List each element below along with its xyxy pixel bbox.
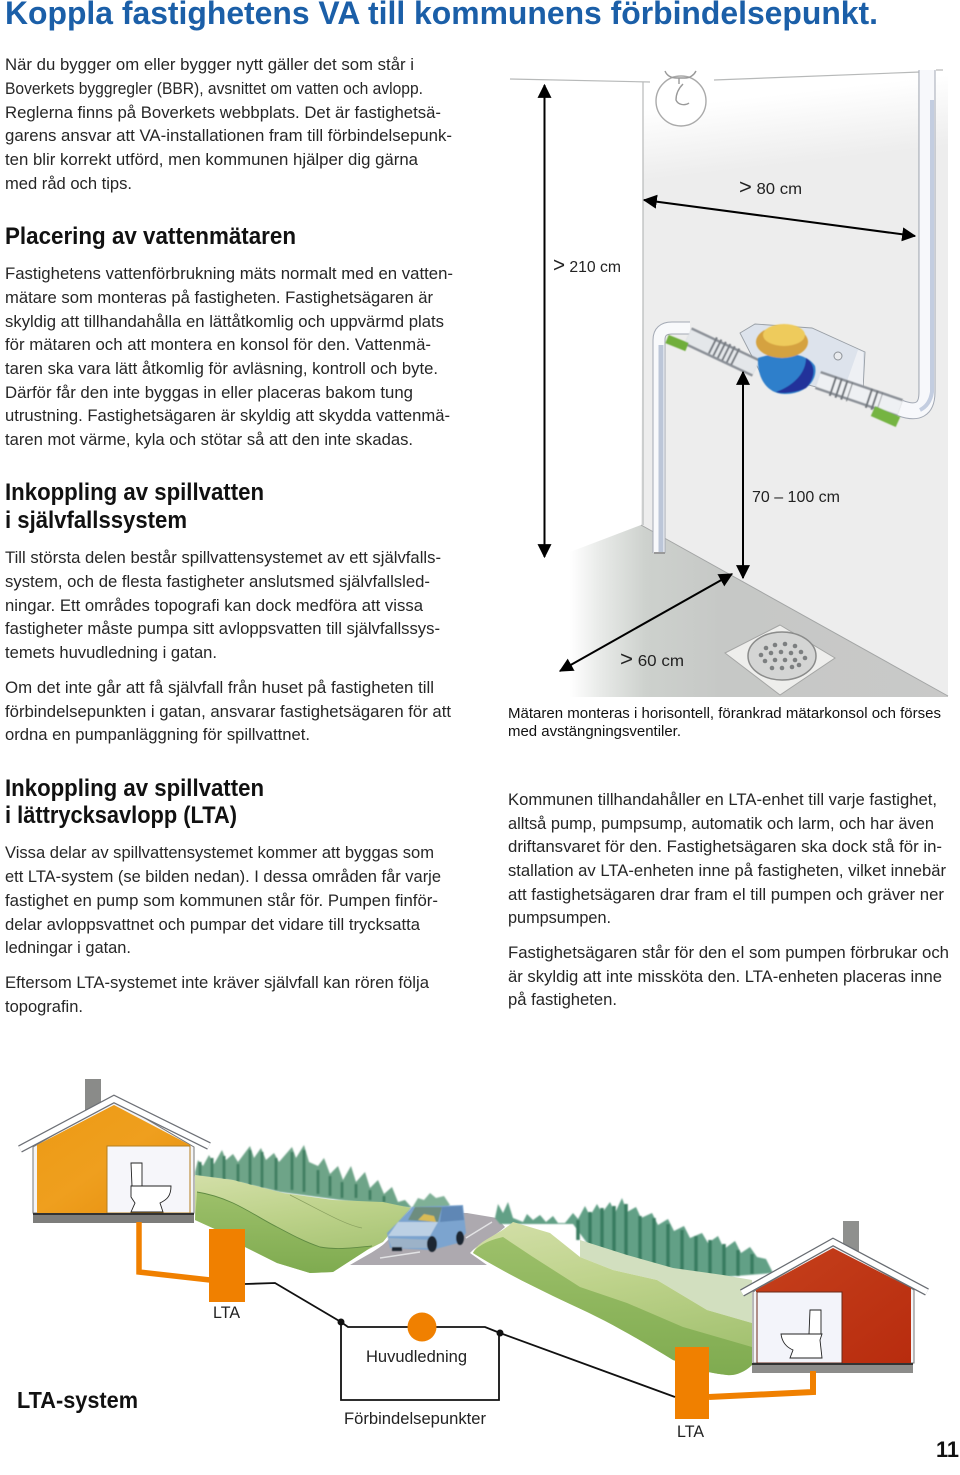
intro text block: När du bygger om eller bygger nytt gäller det som står i	[5, 55, 414, 74]
heading: självfallssystem: i självfallssystem	[5, 507, 187, 534]
text block: lättrycksavlopp: Eftersom LTA-systemet inte kräver självfall kan rören följa	[5, 973, 430, 992]
intro text block: garens ansvar att VA-installationen fram till förbindelsepunk-	[5, 126, 452, 145]
heading: lättrycksavlopp: i lättrycksavlopp (LTA)	[5, 802, 237, 829]
floor	[570, 525, 948, 697]
text block: självfallssystem: Till största delen består spillvattensystemet av ett självfalls-	[5, 548, 441, 567]
connection point: left	[338, 1318, 344, 1326]
house: left	[20, 1079, 209, 1223]
icon: toilet	[781, 1310, 822, 1358]
text block: placering: taren mot värme, kyla och stötar så att den inte skadas.	[5, 430, 413, 449]
text block: kommunens LTA-enhet	[508, 790, 949, 1009]
valves and fittings	[667, 336, 900, 422]
pale slope: right	[580, 1240, 752, 1323]
chimney	[85, 1079, 101, 1111]
text block: kommunens LTA-enhet: på fastigheten.	[508, 990, 617, 1009]
ceiling and corner lines	[510, 72, 920, 525]
text block: placering: skyldig att tillhandahålla en lättåtkomlig och uppvärmd plats	[5, 312, 444, 331]
text block: självfallssystem: system, och de flesta fastigheter anslutsmed självfallsled-	[5, 572, 430, 591]
text block: kommunens LTA-enhet: stallation av LTA-enheten inne på fastigheten, vilket innebär	[508, 861, 946, 880]
heading: LTA-system: LTA-system	[17, 1387, 138, 1413]
text block: lättrycksavlopp: ett LTA-system (se bilden nedan). I dessa områden får varje	[5, 867, 441, 886]
forest: left	[195, 1145, 412, 1208]
label: above 80 cm: > 80 cm	[739, 176, 802, 199]
text block: kommunens LTA-enhet: driftansvaret för den. Fastighetsägaren ska dock stå för in-	[508, 837, 942, 856]
caption: meter illustration: Mätaren monteras i horisontell, förankrad mätarkonsol och förses	[508, 705, 941, 722]
right pipe	[900, 70, 943, 411]
intro text block: Boverkets byggregler (BBR), avsnittet om vatten och avlopp.	[5, 79, 423, 98]
arrow: height above 210 cm	[544, 85, 546, 557]
text block: placering: utrustning. Fastighetsägaren är skyldig att skydda vattenmä-	[5, 406, 450, 425]
walls	[33, 1100, 194, 1213]
connection point: right	[496, 1330, 504, 1336]
text block: kommunens LTA-enhet: är skyldig att inte missköta den. LTA-enheten placeras inne	[508, 967, 942, 986]
text block: självfallssystem: Om det inte går att få självfall från huset på fastigheten till	[5, 678, 434, 697]
main line circle	[408, 1312, 436, 1342]
icon: lamp	[656, 71, 706, 126]
heading: lättrycksavlopp: Inkoppling av spillvatten	[5, 775, 264, 802]
wall background	[641, 72, 948, 697]
text block: självfallssystem: fastigheter måste pumpa sitt avloppsvatten till självfallssys-	[5, 619, 440, 638]
mounting bracket	[740, 324, 865, 390]
text block: självfallssystem: ordna en pumpanläggning för spillvattnet.	[5, 725, 310, 744]
text block: självfallssystem: temets huvudledning i gatan.	[5, 643, 217, 662]
text block: lättrycksavlopp: topografin.	[5, 997, 83, 1016]
house: right	[742, 1221, 927, 1373]
caption: meter illustration	[508, 705, 941, 740]
text block: lättrycksavlopp: fastighet en pump som kommunen står för. Pumpen finför-	[5, 891, 438, 910]
text block: lättrycksavlopp	[5, 843, 441, 1016]
chimney	[843, 1221, 859, 1253]
text block: kommunens LTA-enhet: pumpsumpen.	[508, 908, 611, 927]
pipe: right house to LTA	[709, 1371, 813, 1397]
text block: placering	[5, 264, 453, 449]
heading: självfallssystem: Inkoppling av spillvatten	[5, 479, 264, 506]
icon: toilet	[131, 1163, 171, 1212]
label: LTA left: LTA	[213, 1303, 241, 1322]
forest: right	[495, 1198, 773, 1277]
walls	[753, 1245, 914, 1363]
label: Huvudledning: Huvudledning	[366, 1347, 467, 1366]
hill: right	[473, 1222, 752, 1375]
page number: 11	[936, 1437, 959, 1462]
label: LTA right: LTA	[677, 1422, 705, 1441]
roof	[20, 1099, 209, 1149]
text block: kommunens LTA-enhet: Fastighetsägaren står för den el som pumpen förbrukar och	[508, 943, 949, 962]
foundation	[33, 1213, 194, 1223]
label: 70–100 cm: 70 – 100 cm	[752, 489, 840, 506]
intro text block: ten blir korrekt utförd, men kommunen hjälper dig gärna	[5, 150, 419, 169]
text block: placering: Fastighetens vattenförbrukning mäts normalt med en vatten-	[5, 264, 453, 283]
car	[387, 1205, 466, 1252]
label: above 210 cm: > 210 cm	[553, 254, 621, 277]
intro text block	[5, 55, 452, 193]
pump: left LTA	[209, 1229, 245, 1302]
text block: självfallssystem: förbindelsepunkten i gatan, ansvarar fastighetsägaren för att	[5, 702, 451, 721]
text block: självfallssystem	[5, 548, 451, 744]
text block: lättrycksavlopp: Vissa delar av spillvattensystemet kommer att byggas som	[5, 843, 434, 862]
arrow: meter height 70–100 cm	[742, 372, 744, 578]
illustration: water meter placement	[510, 70, 948, 697]
foundation	[752, 1363, 913, 1373]
room	[757, 1292, 842, 1363]
illustration: LTA system	[20, 1079, 927, 1441]
left pipe	[654, 328, 690, 553]
road	[350, 1212, 505, 1265]
room	[107, 1146, 190, 1213]
heading: självfallssystem	[5, 479, 264, 534]
label: Förbindelsepunkter: Förbindelsepunkter	[344, 1409, 486, 1428]
intro text block: Reglerna finns på Boverkets webbplats. Det är fastighetsä-	[5, 103, 441, 122]
arrow: width above 80 cm	[644, 200, 915, 236]
heading: placering av vattenmätaren: Placering av vattenmätaren	[5, 223, 296, 250]
hill: left	[195, 1175, 411, 1273]
text block: placering: för mätaren och att montera en konsol för den. Vattenmä-	[5, 335, 431, 354]
text block: kommunens LTA-enhet: alltså pump, pumpsump, automatik och larm, och har även	[508, 814, 934, 833]
arrow: depth above 60 cm	[560, 574, 732, 671]
text block: placering: mätare som monteras på fastigheten. Fastighetsägaren är	[5, 288, 433, 307]
pipe: left house to LTA	[139, 1222, 210, 1280]
distant trees behind car	[412, 1193, 450, 1210]
text block: placering: taren ska vara lätt åtkomlig för avläsning, kontroll och byte.	[5, 359, 438, 378]
text block: lättrycksavlopp: delar avloppsvattnet och pumpar det vidare till trycksatta	[5, 915, 421, 934]
text block: självfallssystem: ningar. Ett områdes topografi kan dock medföra att vissa	[5, 596, 424, 615]
text block: kommunens LTA-enhet: Kommunen tillhandahåller en LTA-enhet till varje fastighet,	[508, 790, 937, 809]
text block: placering: Därför får den inte byggas in eller placeras bakom tung	[5, 383, 413, 402]
roof	[742, 1242, 927, 1293]
text block: kommunens LTA-enhet: att fastighetsägaren drar fram el till pumpen och gräver ner	[508, 885, 944, 904]
intro text block: med råd och tips.	[5, 174, 132, 193]
label: above 60 cm: > 60 cm	[620, 648, 684, 671]
meter body	[756, 324, 815, 394]
text block: lättrycksavlopp: ledningar i gatan.	[5, 938, 131, 957]
pump: right LTA	[675, 1347, 709, 1419]
caption: meter illustration: med avstängningsventiler.	[508, 723, 681, 740]
pressure lines and connection points	[245, 1283, 675, 1400]
heading: lättrycksavlopp	[5, 775, 264, 829]
floor drain	[725, 625, 835, 695]
